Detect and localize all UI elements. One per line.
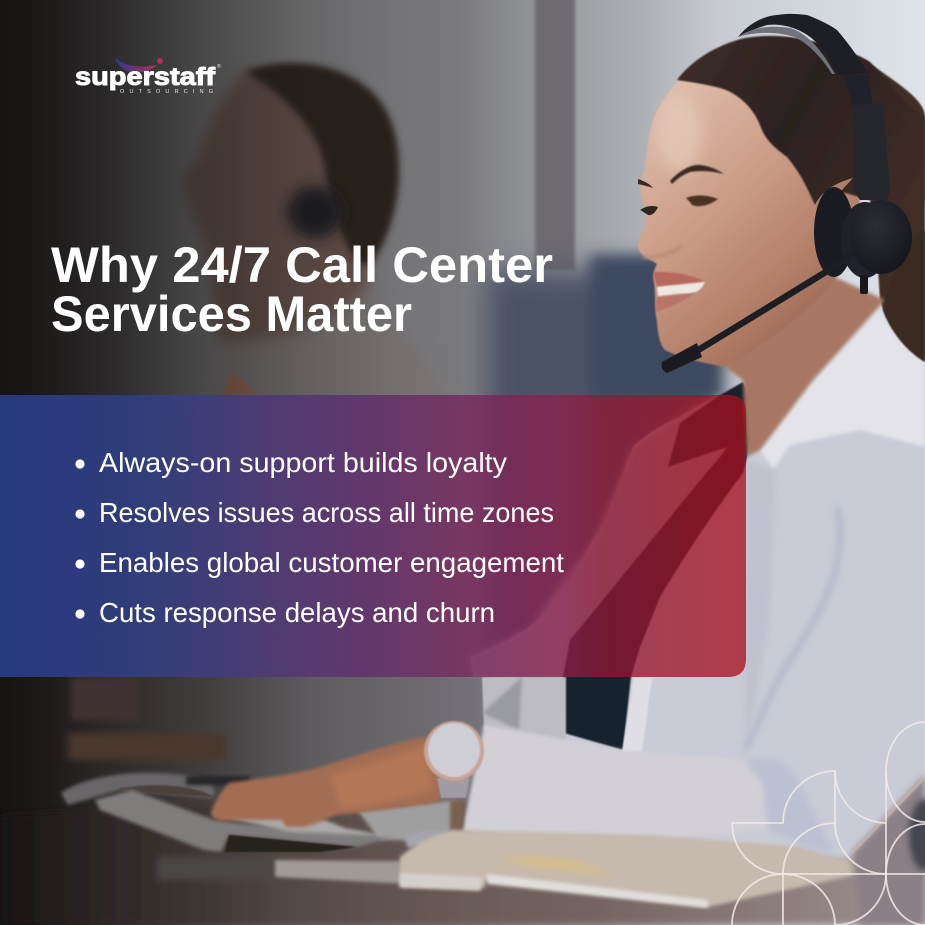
blazer right lower bbox=[852, 775, 925, 925]
mouth bbox=[653, 272, 705, 312]
dark keys bbox=[186, 776, 250, 785]
slider bbox=[843, 75, 873, 105]
lower scene: desk, keyboard, hand, notebook bbox=[0, 677, 925, 925]
stem bbox=[860, 275, 868, 294]
microphone boom bbox=[700, 253, 851, 349]
keyboard bbox=[95, 790, 393, 852]
brown shelf bbox=[68, 677, 225, 760]
ear cup housing bbox=[841, 202, 889, 278]
logo wordmark: superstaff bbox=[75, 63, 216, 91]
lower background bbox=[0, 677, 490, 817]
hair bbox=[677, 36, 925, 300]
registered mark: ® bbox=[217, 63, 221, 70]
headset bbox=[662, 14, 912, 373]
title: Why 24/7 Call Center bbox=[51, 237, 553, 293]
dark shadow bbox=[909, 799, 925, 871]
keyboard keys bbox=[215, 810, 393, 837]
title: Services Matter bbox=[51, 286, 412, 342]
shaded left blazer side bbox=[470, 395, 745, 720]
headband inner highlight bbox=[738, 27, 835, 74]
blazer body bbox=[460, 307, 925, 880]
colleague hand bbox=[222, 372, 258, 395]
bullet 3: Enables global customer engagement bbox=[99, 547, 564, 578]
grey sleeve fold bbox=[482, 677, 522, 730]
colleague headset bbox=[287, 186, 343, 238]
notebook left edge bbox=[400, 873, 482, 890]
notebook fold tint bbox=[495, 856, 615, 875]
headband arm bbox=[853, 103, 890, 200]
tan seam line bbox=[852, 777, 925, 853]
forehead highlight bbox=[658, 97, 702, 173]
logo subline: OUTSOURCING bbox=[120, 89, 213, 95]
ponytail strands bbox=[883, 230, 925, 362]
neck bbox=[725, 275, 885, 457]
ear cup bbox=[850, 200, 912, 274]
nose shading bbox=[643, 246, 682, 257]
ponytail behind bbox=[865, 60, 925, 362]
notebook left page bbox=[275, 860, 486, 888]
logo: superstaff outsourcing bbox=[75, 58, 221, 95]
blazer sleeve bbox=[462, 725, 768, 838]
ear bbox=[815, 178, 853, 225]
blazer strip beside dark top bbox=[482, 677, 566, 745]
panel: key benefits gradient card bbox=[0, 395, 746, 677]
notebook page edge bbox=[487, 874, 708, 908]
decorative line pattern bbox=[732, 722, 925, 925]
lower blazer cuff bbox=[745, 758, 835, 855]
background pillar bbox=[535, 0, 575, 270]
left eye bbox=[640, 206, 658, 215]
arm fold shadow bbox=[745, 507, 840, 750]
headband bbox=[738, 14, 868, 75]
right eye bbox=[686, 195, 718, 206]
watch strap tail bbox=[450, 800, 463, 830]
face bbox=[638, 70, 860, 367]
colleague shirt bbox=[140, 285, 480, 680]
collar bbox=[760, 307, 925, 470]
desk surface bbox=[0, 802, 925, 925]
bullet 4: Cuts response delays and churn bbox=[99, 597, 495, 628]
desk right of hand bbox=[357, 800, 457, 840]
crumpled cable bbox=[404, 831, 460, 850]
title bbox=[51, 237, 553, 342]
ear cushion bbox=[814, 187, 854, 277]
bullet 2: Resolves issues across all time zones bbox=[99, 497, 554, 528]
mouse bbox=[61, 773, 215, 805]
blurred colleague bbox=[140, 63, 480, 680]
colleague hair bbox=[245, 63, 399, 265]
wristwatch bbox=[424, 721, 484, 830]
logo dot bbox=[157, 58, 163, 64]
bullet list bbox=[75, 447, 564, 628]
dark top under blazer bbox=[563, 382, 757, 750]
hand and forearm bbox=[211, 737, 443, 827]
watch band bbox=[437, 778, 470, 798]
woman with headset bbox=[460, 14, 925, 880]
darker monitor block bbox=[590, 255, 720, 400]
bullet 1: Always-on support builds loyalty bbox=[99, 447, 507, 478]
left book block bbox=[157, 857, 275, 880]
mouse dark inset bbox=[118, 785, 214, 797]
microphone tip bbox=[662, 343, 702, 373]
colleague face and neck bbox=[183, 70, 371, 341]
notebook right page bbox=[400, 830, 879, 907]
white lapel strip bbox=[622, 677, 652, 752]
hand highlight bbox=[330, 745, 432, 808]
logo swoosh bbox=[115, 58, 157, 72]
blurred blue monitors bbox=[485, 270, 720, 680]
eyebrows bbox=[670, 165, 724, 184]
keyboard shadow bbox=[225, 835, 357, 852]
right blazer shading bbox=[745, 460, 775, 760]
